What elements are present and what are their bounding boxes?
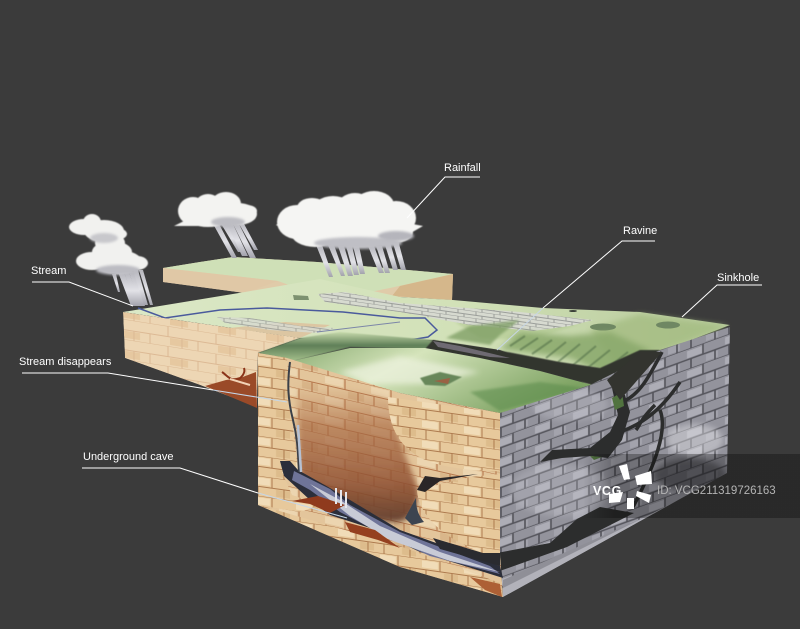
rust cave dome [296, 384, 418, 522]
main top surface [123, 279, 730, 385]
sinkhole on surface, right [569, 310, 680, 330]
rain, middle cloud [212, 222, 258, 258]
label: Stream [31, 265, 133, 306]
left slab side [123, 312, 300, 407]
watermark band [583, 454, 800, 518]
dark rectangular patch on surface [293, 295, 309, 300]
rain, left cloud [112, 270, 153, 306]
cloud middle [174, 192, 258, 258]
ravine floor, purple sliver [433, 341, 510, 358]
lower front grass surface [288, 348, 596, 413]
stream line [138, 308, 437, 340]
label: Sinkhole [682, 272, 762, 317]
watermark logo: VCG [593, 484, 622, 498]
label: Stream: Stream [31, 265, 66, 277]
cracks in grey rock [500, 351, 682, 597]
cloud right [276, 191, 423, 277]
front slope grass [258, 332, 433, 362]
rain, right cloud [316, 240, 406, 277]
light block, right of cave [388, 397, 500, 472]
label: Sinkhole: Sinkhole [717, 272, 759, 284]
ravine slopes [446, 320, 650, 376]
rust stain: stream disappears [205, 368, 257, 408]
dark cave hollow [405, 498, 424, 525]
label: Underground cave: Underground cave [83, 451, 174, 463]
watermark logo [593, 464, 652, 509]
label: Ravine: Ravine [623, 225, 657, 237]
light and dark modelling on grey rock [510, 389, 726, 516]
front tan brick face [250, 350, 510, 600]
second stream line [317, 322, 400, 332]
left front pillar [258, 353, 320, 512]
label: Stream disappears: Stream disappears [19, 356, 112, 368]
waterfall crack [288, 362, 299, 472]
lower tan section [258, 505, 503, 597]
label: Ravine [497, 225, 657, 350]
limestone pavement strips [217, 292, 593, 333]
ravine floor, dark [425, 340, 660, 398]
label: Rainfall [407, 162, 481, 218]
watermark ID text: ID: VCG211319726163 [657, 485, 776, 497]
upper back plateau [163, 257, 453, 300]
label: Rainfall: Rainfall [444, 162, 481, 174]
cloud left [69, 214, 153, 306]
light lower block, right [417, 474, 500, 553]
waterfall water [298, 425, 301, 472]
infographic: karst landscape block diagram [20, 163, 800, 597]
underground stream and cave [280, 461, 503, 597]
right grey limestone face [497, 327, 730, 597]
label: Stream disappears [19, 356, 287, 402]
label: Underground cave [82, 451, 347, 518]
crack in block [417, 474, 478, 492]
